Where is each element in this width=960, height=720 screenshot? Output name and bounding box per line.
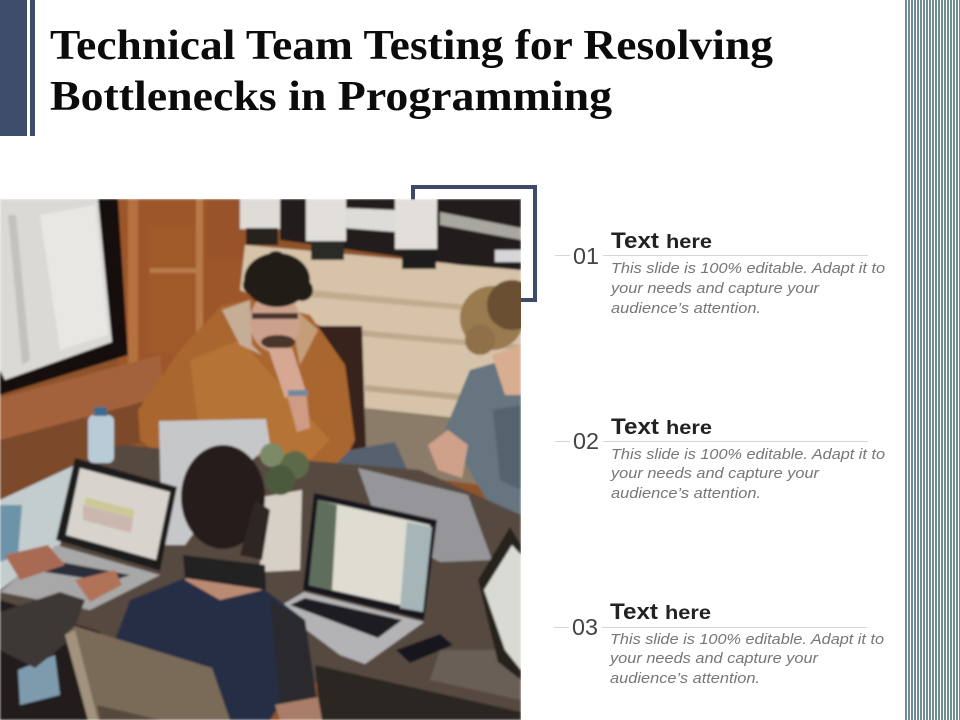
right grey laptop (358, 468, 492, 562)
heading 03: Text (610, 599, 659, 624)
heading 02: here (666, 418, 712, 439)
body 02 (610, 446, 885, 502)
number 02: 02 (573, 428, 599, 454)
title: Bottlenecks in Programming (50, 74, 612, 120)
connector lines 01 (555, 255, 868, 256)
body 01: This slide is 100% editable. Adapt it to (611, 260, 885, 277)
water bottle (88, 407, 114, 463)
item 03 (554, 599, 884, 687)
table (0, 445, 521, 720)
heading 01: Text (611, 228, 660, 253)
man with headphones (112, 445, 322, 720)
item 01 (555, 228, 885, 317)
body 01 (610, 260, 885, 317)
connector lines 03 (554, 627, 867, 628)
laptop left (0, 458, 177, 610)
item 02 (555, 414, 885, 502)
body 01: your needs and capture your (610, 280, 820, 297)
heading 01: here (666, 232, 712, 253)
left accent bars (0, 0, 35, 136)
man in orange hoodie (138, 251, 355, 470)
window (0, 199, 128, 395)
wooden chair (65, 626, 230, 720)
body 01: audience’s attention. (611, 300, 761, 317)
number 03: 03 (572, 614, 598, 640)
jeans (336, 442, 408, 470)
chandelier (240, 199, 521, 270)
photo frame (413, 187, 535, 300)
plant and vase (260, 443, 309, 572)
heading 03: here (665, 603, 711, 624)
body 03: your needs and capture your (609, 650, 819, 667)
heading 02: Text (611, 414, 660, 439)
wood wall (0, 228, 488, 720)
number 01: 01 (573, 243, 599, 269)
body 03: This slide is 100% editable. Adapt it to (610, 631, 884, 648)
man on right (427, 278, 521, 516)
woman's arm and hands (0, 545, 122, 668)
striped right band (905, 0, 960, 720)
lower wood panels (0, 355, 165, 500)
connector lines 02 (555, 441, 868, 442)
log wall (240, 245, 521, 490)
title: Technical Team Testing for Resolving (50, 23, 773, 69)
background chair (318, 326, 366, 460)
wood door (118, 199, 253, 374)
tablet right (478, 527, 521, 680)
centre laptop lid (159, 419, 270, 545)
photo: team working on laptops (0, 199, 537, 720)
heading 03 (610, 599, 711, 624)
phone (396, 634, 453, 663)
heading 01 (611, 228, 712, 253)
title (50, 23, 773, 120)
body 03 (609, 631, 884, 687)
centre laptop (277, 493, 437, 664)
body 02: This slide is 100% editable. Adapt it to (611, 446, 885, 463)
body 02: audience’s attention. (611, 485, 761, 502)
body 02: your needs and capture your (610, 465, 820, 482)
body 03: audience’s attention. (610, 670, 760, 687)
heading 02 (611, 414, 712, 439)
